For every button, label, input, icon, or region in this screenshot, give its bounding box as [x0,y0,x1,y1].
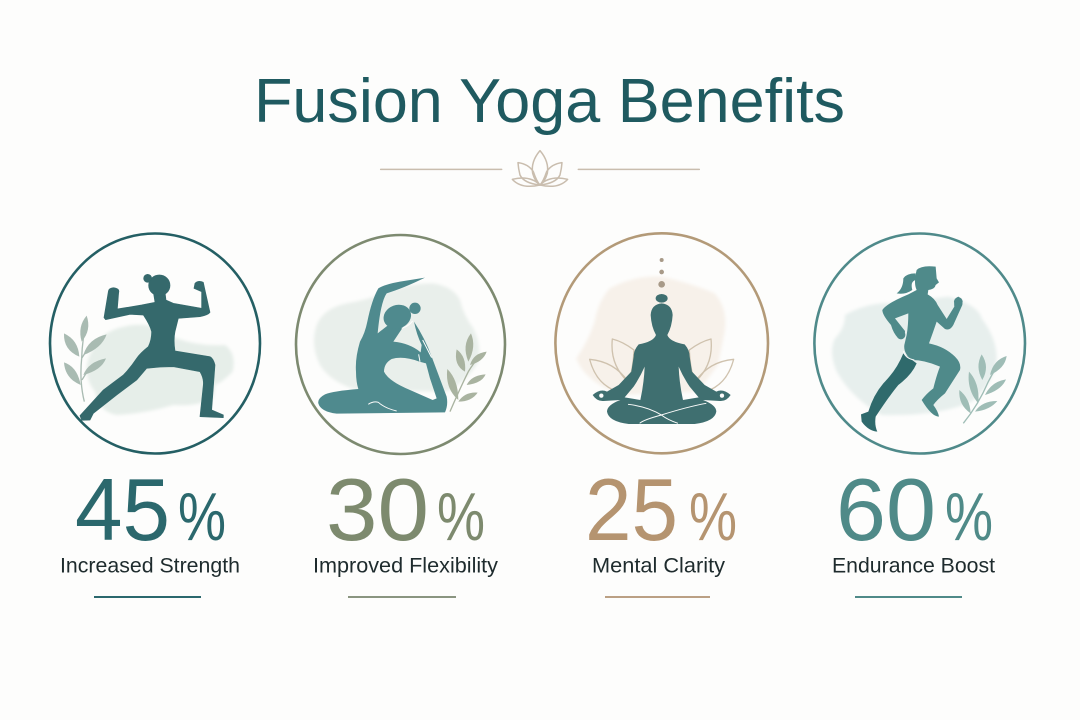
fold lines [368,321,432,411]
watercolor blob [576,276,725,395]
figure silhouette [882,266,963,417]
watercolor blob [832,297,997,415]
leaf sprig [447,333,487,412]
hip line [903,351,914,360]
ring [296,235,505,454]
stat: 30 percent [326,460,485,559]
lotus divider [381,151,699,186]
lotus petals [590,339,734,392]
illustration: meditation pose [576,258,734,424]
label: Increased Strength [60,554,240,578]
label: Mental Clarity [592,554,726,578]
stat: 45 percent: % [178,479,226,555]
stat: 30 percent: % [437,479,485,555]
watercolor blob [87,325,234,415]
leaf sprig [64,316,107,402]
underline [855,596,962,598]
stat: 45 percent: 45 [75,460,170,559]
illustration: warrior pose [64,274,234,420]
watercolor blob [314,283,479,392]
stat: 25 percent: 25 [585,460,678,559]
figure silhouette [593,294,731,424]
label: Improved Flexibility [313,554,499,578]
stat: 25 percent: % [689,479,737,555]
title: Fusion Yoga Benefits [254,67,845,136]
stat: 30 percent: 30 [326,460,429,559]
panel: mental clarity [555,233,768,598]
underline [94,596,201,598]
illustration: mermaid pose [314,278,487,414]
stat: 60 percent: % [945,479,993,555]
hand gaps and crossed-leg lines [599,394,724,423]
stat: 60 percent: 60 [836,460,936,559]
figure silhouette [80,274,223,420]
ring [814,234,1025,454]
back leg [861,353,917,432]
energy dots [658,258,665,288]
ring [555,233,768,453]
stat: 25 percent [585,460,737,559]
panel: increased strength [50,234,260,598]
underline [348,596,456,598]
illustration: runner [832,266,1007,432]
panel: endurance boost [814,234,1025,598]
leaf sprig [959,354,1007,423]
figure silhouette [318,278,447,414]
panel: improved flexibility [296,235,505,598]
ring [50,234,260,454]
underline [605,596,710,598]
stat: 45 percent [75,460,226,559]
label: Endurance Boost [832,554,995,578]
stat: 60 percent [836,460,993,559]
